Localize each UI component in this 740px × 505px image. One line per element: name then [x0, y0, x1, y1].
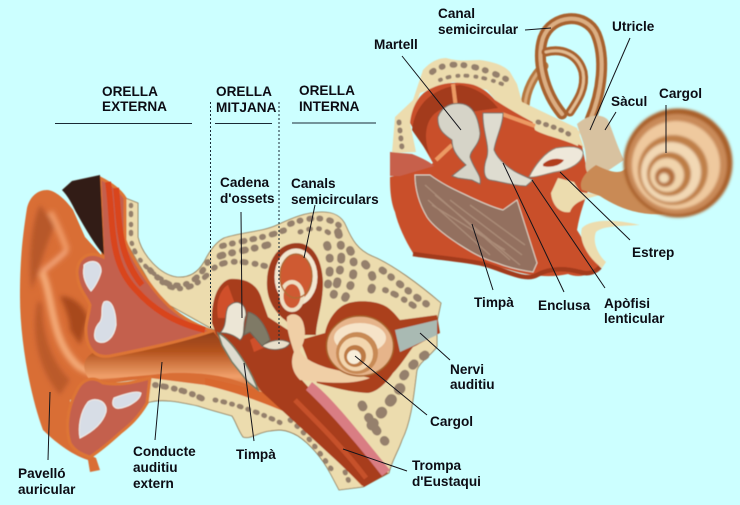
lower soft-tissue band	[205, 378, 372, 486]
label: martell: Martell	[374, 37, 418, 52]
Eustachian tube highlight	[295, 400, 366, 478]
lower right bone	[581, 221, 640, 268]
label: estrep: Estrep	[632, 245, 674, 260]
middle ear cavity wall	[390, 83, 600, 276]
label: conducte auditiu extern: Conducte	[133, 444, 196, 459]
upper bone lip speckles	[538, 122, 574, 138]
label: pavello auricular: auricular	[18, 482, 76, 497]
lower bone fragment	[551, 178, 600, 212]
label: apofisi lenticular: lenticular	[604, 311, 665, 326]
darker upper cavity	[412, 85, 498, 160]
label: nervi auditiu: Nervi	[450, 362, 484, 377]
inner ear cavity	[300, 301, 440, 393]
label: conducte auditiu extern: auditiu	[133, 460, 178, 475]
cochlear duct	[581, 165, 665, 214]
cochlea	[624, 108, 732, 218]
label: canals semicirculars: Canals	[291, 176, 336, 191]
pinna	[20, 190, 260, 472]
semicircular canal cavity	[267, 243, 323, 335]
label: trompa d'Eustaqui: d'Eustaqui	[412, 474, 481, 489]
bone speckles	[131, 205, 428, 484]
Eustachian tube muscle	[306, 382, 390, 476]
tendon strands	[436, 84, 535, 160]
heading: inner ear: ORELLA	[299, 83, 355, 98]
label: canals semicirculars: semicirculars	[291, 192, 379, 207]
label: canal semicircular: Canal	[438, 6, 475, 21]
label: timpa detail: Timpà	[474, 295, 514, 310]
heading: middle ear: ORELLA	[216, 84, 272, 99]
heading: middle ear: MITJANA	[216, 100, 277, 115]
cartilage pieces	[79, 261, 141, 438]
cochlea	[326, 316, 394, 376]
label: cadena d'ossets: Cadena	[220, 175, 269, 190]
leader lines	[48, 28, 666, 471]
label: apofisi lenticular: Apòfisi	[604, 296, 650, 311]
pink tissue	[390, 152, 434, 176]
semicircular canals	[277, 251, 315, 310]
cavity lower edge	[413, 254, 600, 277]
vestibule	[287, 314, 370, 383]
section dividers	[55, 102, 376, 345]
label: cadena d'ossets: d'ossets	[220, 191, 275, 206]
muscle stripes	[108, 182, 205, 330]
label: cargol detail: Cargol	[659, 86, 702, 101]
illustration: whole ear cross-section	[20, 175, 441, 490]
stapes	[529, 147, 583, 177]
lower cartilage tissue	[68, 378, 150, 457]
heading: outer ear: ORELLA	[102, 84, 158, 99]
heading: inner ear: INTERNA	[299, 99, 360, 114]
malleus	[438, 104, 480, 184]
incus	[483, 113, 533, 186]
eardrum	[415, 175, 537, 272]
ossicles	[220, 302, 290, 350]
label: pavello auricular: Pavelló	[18, 466, 66, 481]
pinna shading	[30, 205, 120, 395]
eardrum fibres	[425, 185, 525, 265]
eardrum	[218, 333, 258, 390]
skull bone	[123, 197, 441, 490]
label: trompa d'Eustaqui: Trompa	[412, 458, 461, 473]
illustration: middle and inner ear detail	[390, 19, 732, 277]
bone block	[392, 58, 584, 153]
semicircular canals	[525, 19, 602, 120]
label: nervi auditiu: auditiu	[450, 377, 495, 392]
upper cartilage tissue	[77, 178, 212, 356]
label: canal semicircular: semicircular	[438, 22, 519, 37]
label: enclusa: Enclusa	[538, 298, 591, 313]
upper bone lip	[530, 113, 580, 146]
label: conducte auditiu extern: extern	[133, 476, 174, 491]
label: timpa: Timpà	[236, 447, 276, 462]
hair	[62, 175, 104, 255]
label: utricle: Utricle	[612, 19, 655, 34]
inner red of ossicle zone	[217, 285, 270, 352]
vestibule	[577, 116, 624, 176]
heading: outer ear: EXTERNA	[102, 99, 167, 114]
label: cargol: Cargol	[430, 414, 473, 429]
ear canal	[84, 330, 262, 392]
auditory nerve	[395, 320, 437, 352]
label: sacul: Sàcul	[611, 94, 647, 109]
middle ear cavity and Eustachian tube	[212, 279, 388, 487]
bone speckles	[399, 65, 508, 148]
